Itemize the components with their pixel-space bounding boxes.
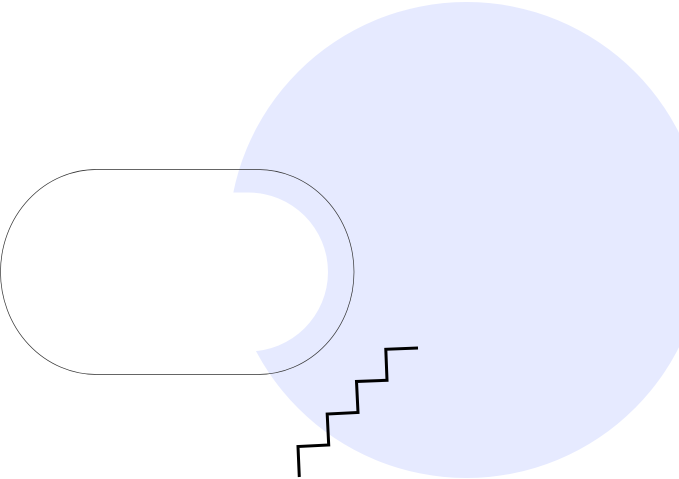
background circle — [228, 2, 679, 478]
zigzag staircase line — [298, 348, 418, 477]
outlined pill — [0, 170, 354, 374]
white inner pill cutout — [60, 192, 328, 352]
